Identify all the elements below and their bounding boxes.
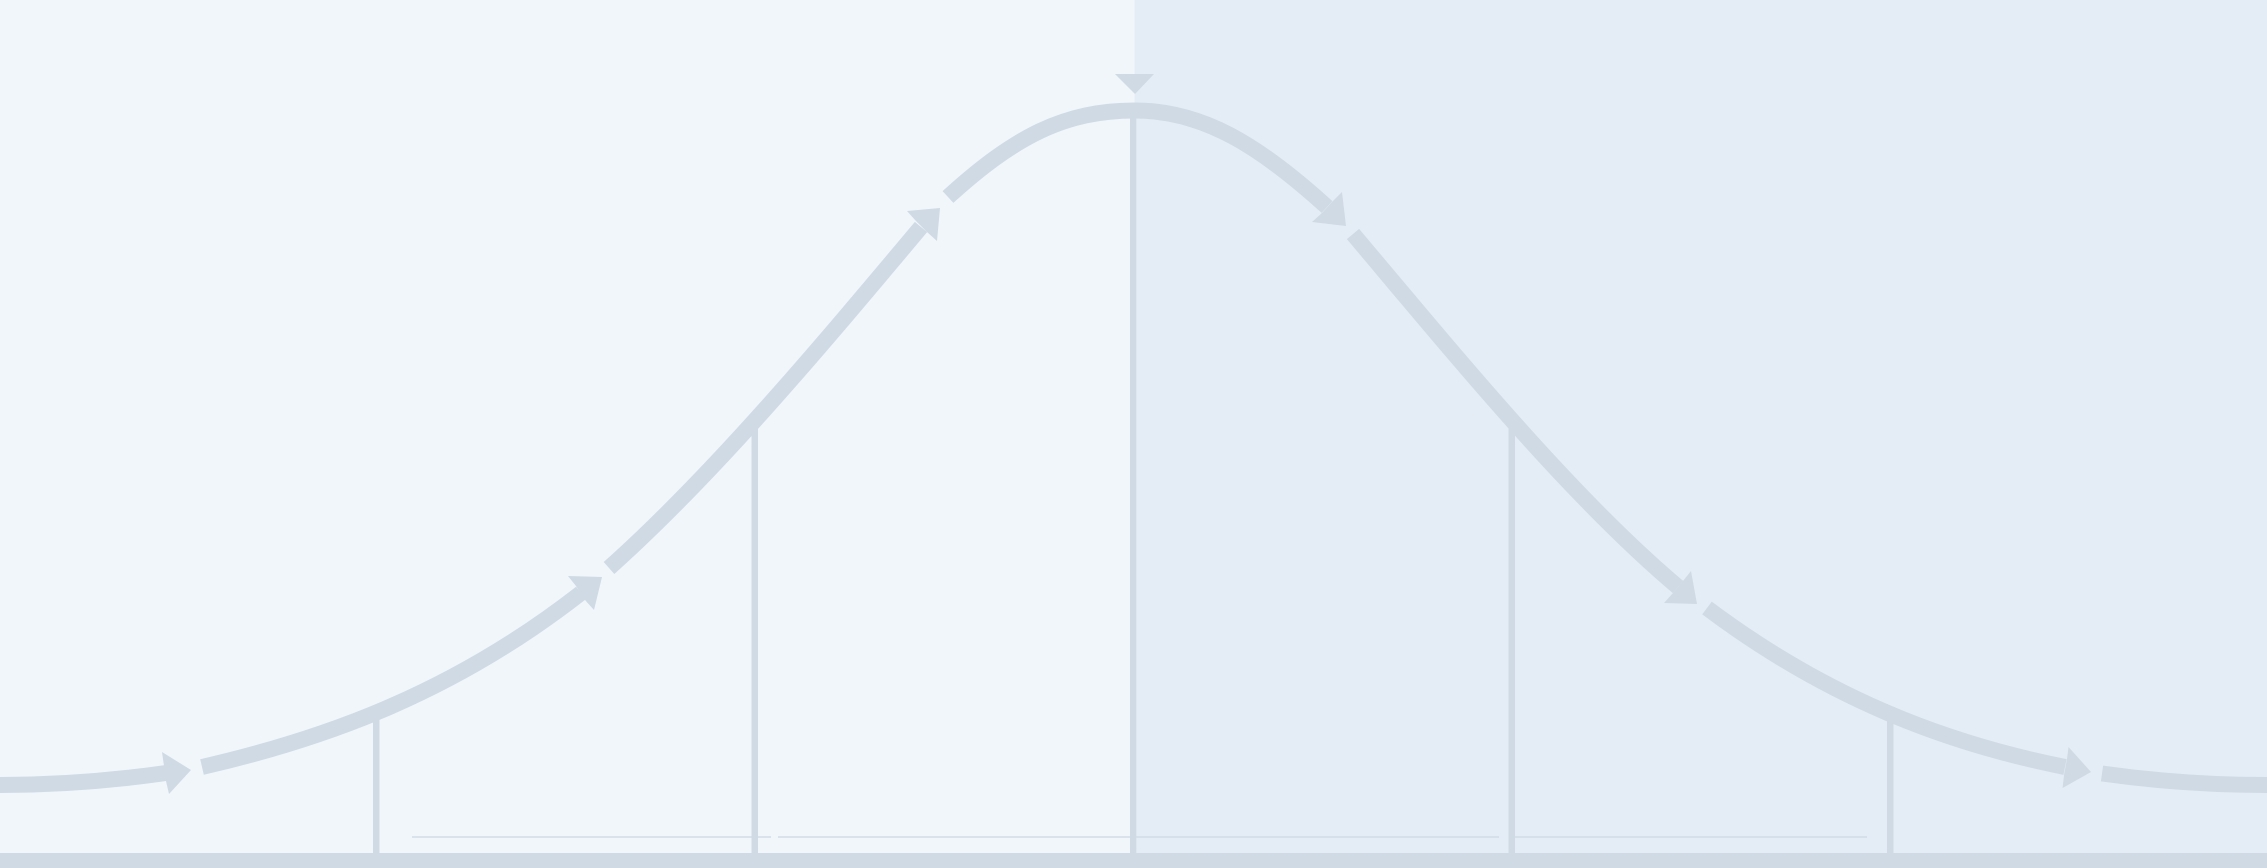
panel: left background [0, 0, 1135, 868]
peak marker triangle [1115, 74, 1154, 94]
panel: right background [1135, 0, 2267, 868]
bottom axis bar [0, 853, 2267, 868]
vertical marker lines [373, 110, 1894, 854]
curve segments [0, 110, 2267, 785]
arrowheads along the curve [162, 192, 2091, 794]
thin baseline rule [412, 836, 1867, 838]
